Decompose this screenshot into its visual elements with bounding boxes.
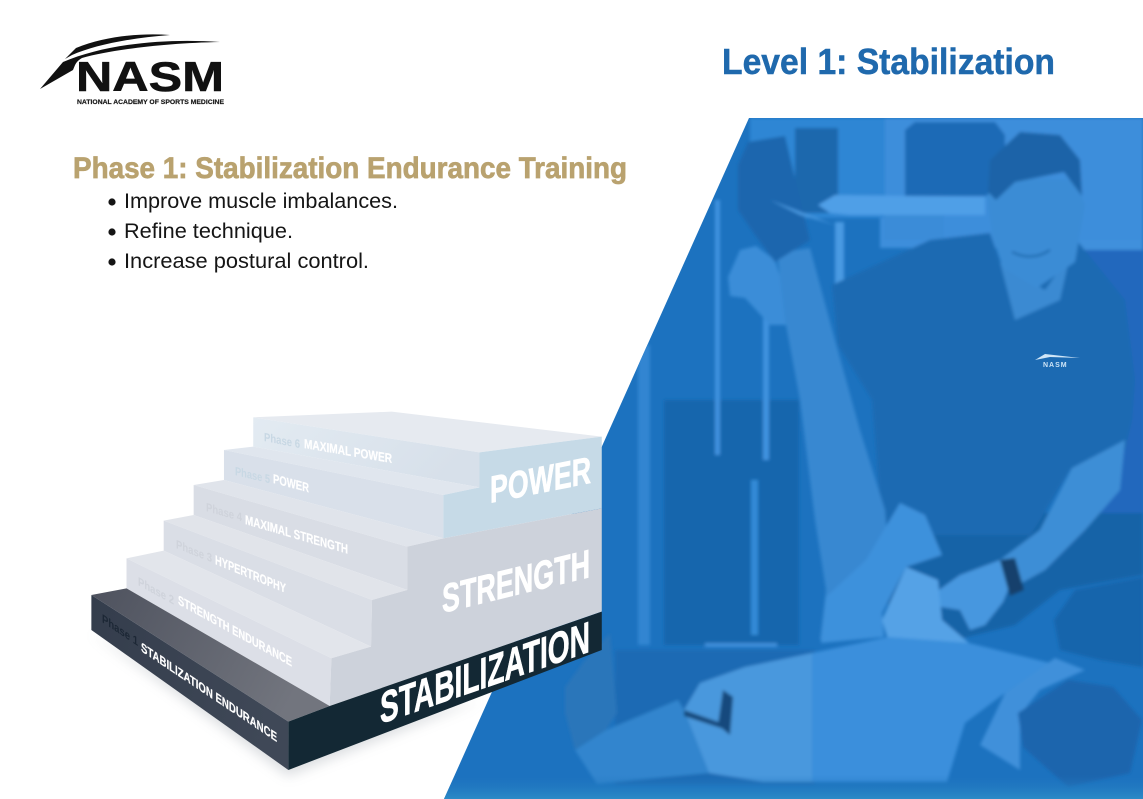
logo swoosh upper xyxy=(65,34,170,59)
lying client: forearm, sleeve and shirt xyxy=(812,503,1050,782)
step 6 riser xyxy=(253,417,480,487)
base top surface xyxy=(91,588,330,722)
side face: strength xyxy=(330,508,602,706)
trainer: shirt logo: NASM xyxy=(1043,362,1068,369)
lying client: shorts and lower leg xyxy=(565,633,812,784)
grass strip xyxy=(444,780,1143,799)
step 5 tread xyxy=(224,447,480,495)
side face: power xyxy=(443,437,602,538)
stair shadow xyxy=(91,632,480,776)
logo wordmark: NASM xyxy=(76,53,224,100)
bullet 2: Refine technique. xyxy=(124,220,293,243)
trainer: shirt and trousers xyxy=(832,233,1143,640)
raised foot shoe xyxy=(738,136,835,262)
label: stabilization: STABILIZATION xyxy=(380,612,590,734)
raised leg xyxy=(728,246,888,640)
label: stabilization endurance: STABILIZATION ENDURANCE xyxy=(141,640,277,746)
trainer: head xyxy=(987,132,1085,288)
top surface xyxy=(253,412,602,452)
label: phase 6: Phase 6 xyxy=(264,430,300,451)
step 3 riser xyxy=(164,521,372,647)
label: phase 4: Phase 4 xyxy=(206,500,242,524)
step 2 tread xyxy=(126,551,371,658)
base left face xyxy=(91,595,288,770)
staircase diagram xyxy=(91,412,602,776)
logo swoosh lower xyxy=(40,41,220,89)
step 4 riser xyxy=(194,485,407,590)
background: dumbbell xyxy=(1054,577,1143,667)
label: power: POWER xyxy=(490,449,591,512)
bullet 3: Increase postural control. xyxy=(124,250,369,273)
title: Level 1: Stabilization xyxy=(722,41,1055,82)
lying client: head xyxy=(980,658,1142,787)
trainer: arm and hand xyxy=(932,440,1125,630)
trainer: shirt logo xyxy=(1035,354,1080,367)
base right face xyxy=(288,612,602,770)
label: strength endurance: STRENGTH ENDURANCE xyxy=(178,592,292,669)
heading: phase 1: Phase 1: Stabilization Endurance Training xyxy=(73,152,627,185)
step 4 tread xyxy=(194,480,443,547)
label: power phase: POWER xyxy=(273,471,309,495)
label: phase 1: Phase 1 xyxy=(102,611,138,649)
logo: NASM xyxy=(40,34,224,106)
step 3 tread xyxy=(164,515,407,600)
bullet 1: Improve muscle imbalances. xyxy=(124,190,398,213)
label: strength: STRENGTH xyxy=(442,541,590,622)
step 5 riser xyxy=(224,450,443,538)
background: gym upper wall xyxy=(750,118,1143,550)
step 2 riser xyxy=(126,558,331,706)
label: maximal strength: MAXIMAL STRENGTH xyxy=(245,512,348,557)
panel: blue training photo xyxy=(444,118,1143,799)
label: phase 2: Phase 2 xyxy=(138,574,174,608)
background: dark rig and bars xyxy=(615,200,815,785)
label: phase 3: Phase 3 xyxy=(176,537,212,565)
bullet list xyxy=(108,190,398,273)
label: phase 5: Phase 5 xyxy=(235,464,270,486)
label: hypertrophy: HYPERTROPHY xyxy=(215,552,286,596)
label: maximal power: MAXIMAL POWER xyxy=(304,436,392,466)
logo tagline: NATIONAL ACADEMY OF SPORTS MEDICINE xyxy=(77,99,224,106)
